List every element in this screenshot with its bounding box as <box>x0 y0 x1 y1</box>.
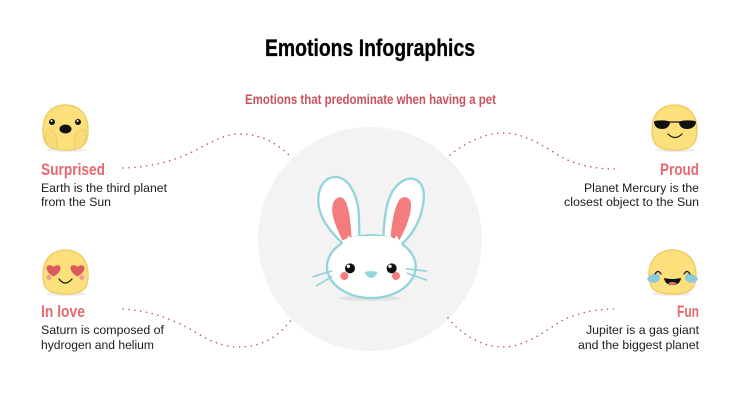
connector: in love <box>123 309 291 347</box>
title: Emotions Infographics <box>265 35 475 62</box>
heading: fun: Fun <box>677 302 699 321</box>
icon: in love emoji <box>43 250 88 296</box>
heading: in love: In love <box>41 302 85 321</box>
central circle <box>258 127 482 351</box>
text: surprised description <box>41 181 168 209</box>
icon: proud emoji <box>652 105 697 152</box>
text: fun description: and the biggest planet <box>578 338 700 352</box>
connector: proud <box>450 133 616 169</box>
text: proud description <box>564 181 699 209</box>
icon: surprised emoji <box>43 105 88 152</box>
text: fun description: Jupiter is a gas giant <box>586 323 700 337</box>
text: proud description: closest object to the Sun <box>564 195 699 209</box>
bunny illustration <box>313 177 427 301</box>
heading: proud: Proud <box>660 160 699 179</box>
text: fun description <box>578 323 700 352</box>
connector: surprised <box>123 134 291 168</box>
text: surprised description: Earth is the third planet <box>41 181 168 195</box>
subtitle: Emotions that predominate when having a pet <box>245 92 496 107</box>
text: surprised description: from the Sun <box>41 195 111 209</box>
heading: surprised: Surprised <box>41 160 105 179</box>
icon: fun emoji <box>647 250 698 296</box>
connector: fun <box>448 309 617 347</box>
text: in love description <box>41 323 165 352</box>
text: in love description: hydrogen and helium <box>41 338 154 352</box>
text: in love description: Saturn is composed of <box>41 323 165 337</box>
text: proud description: Planet Mercury is the <box>584 181 699 195</box>
